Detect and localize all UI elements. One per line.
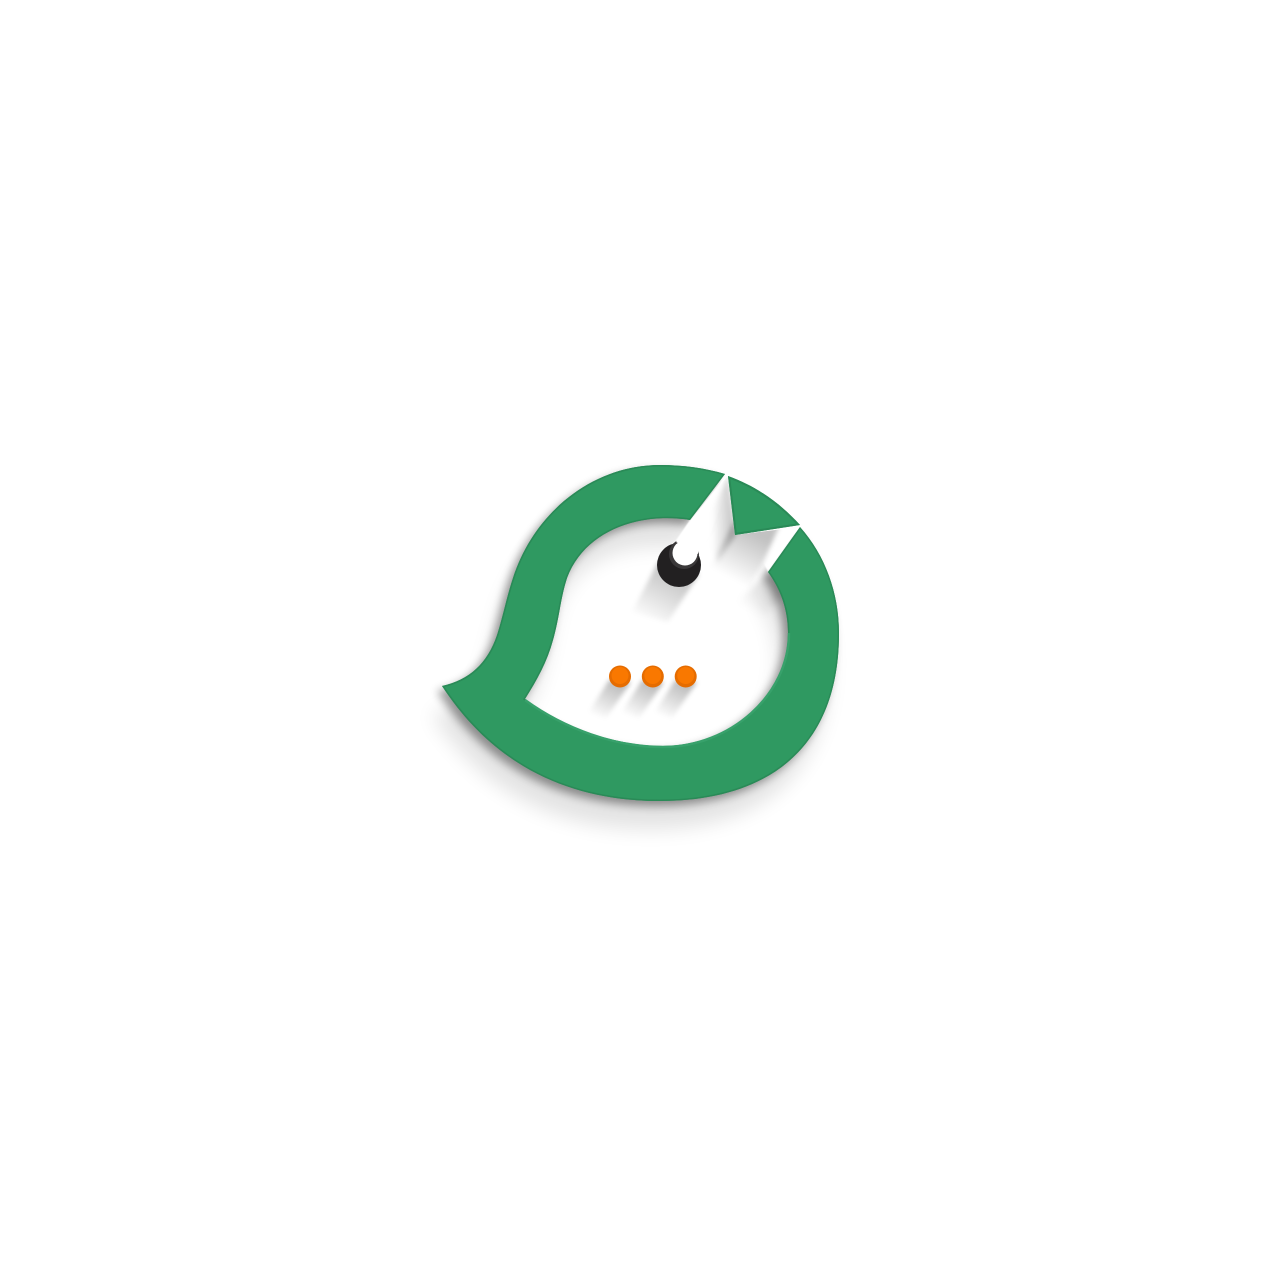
inner rim highlight — [525, 633, 789, 747]
icon: eye — [657, 530, 704, 587]
eye shadow — [632, 562, 699, 622]
typing dots — [609, 666, 697, 688]
white gap near wedge tip — [758, 527, 800, 572]
long outer shadow — [432, 470, 834, 829]
logo: chat bubble bird — [432, 465, 839, 829]
dot shadows — [589, 680, 697, 718]
green ring — [442, 465, 839, 801]
green wedge — [728, 476, 800, 535]
inner white beam — [672, 477, 727, 560]
wedge cast shadow — [714, 478, 782, 608]
